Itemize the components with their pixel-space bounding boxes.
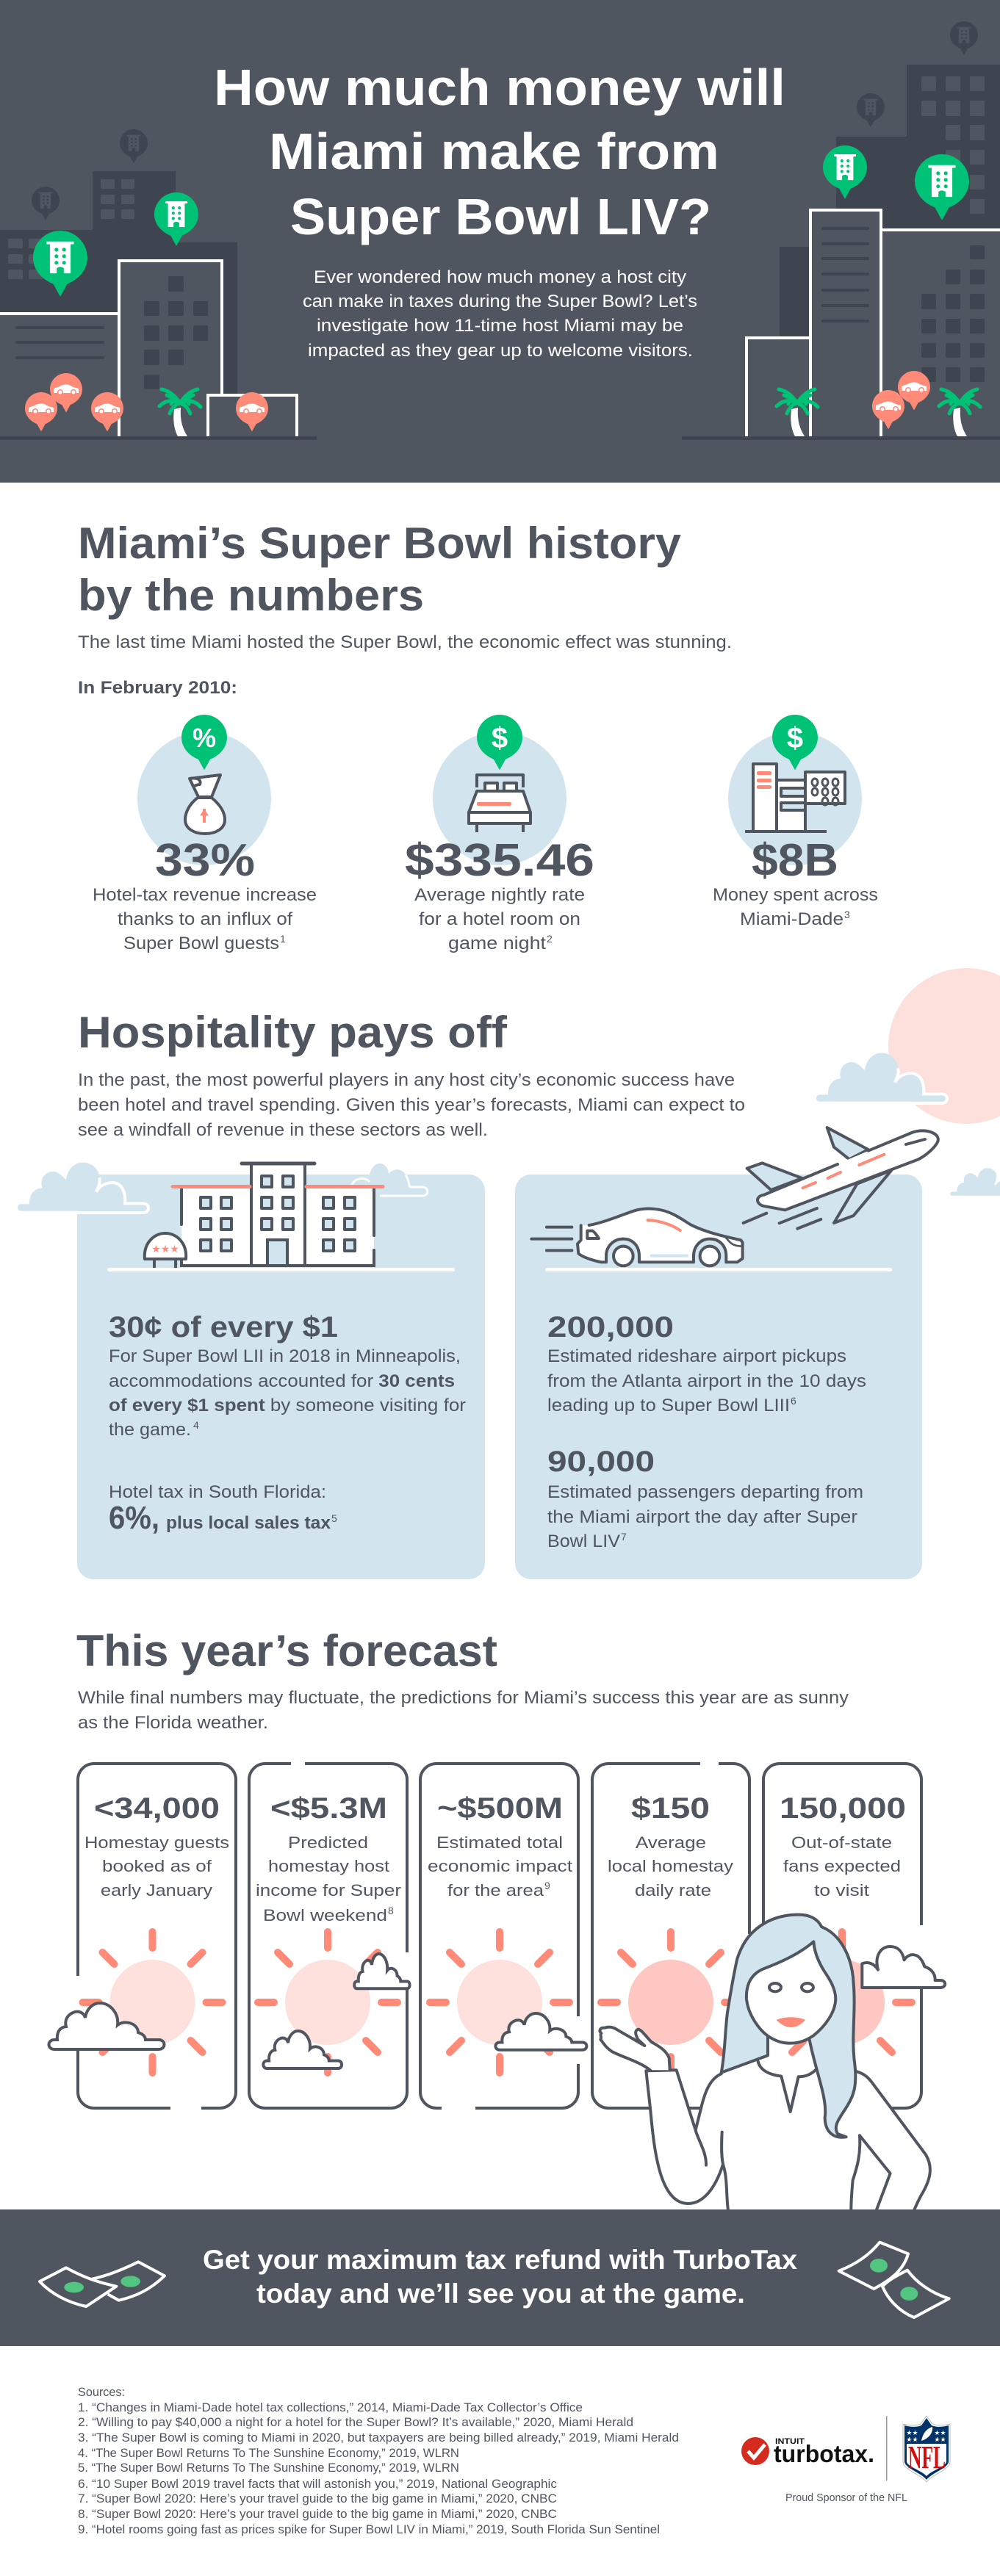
icon: city buildings [745, 764, 845, 831]
cloud: right edge [950, 1168, 1000, 1197]
palm trees [159, 389, 980, 436]
stat: $335.46: $335.46 [405, 835, 594, 886]
sun [258, 1932, 398, 2073]
sources: 5. “The Super Bowl Returns To The Sunshine Economy,” 2019, WLRN [78, 2461, 459, 2475]
cloud: lower [263, 2031, 342, 2068]
pin: percent: % [193, 723, 216, 753]
stat: $8B [713, 715, 878, 929]
forecast card 2: Bowl weekend [263, 1906, 387, 1924]
stat: 90,000: 7 [621, 1531, 627, 1543]
text: Minneapolis: For Super Bowl LII in 2018 in Minneapolis, [109, 1346, 461, 1366]
stat: 33%: Super Bowl guests [123, 934, 279, 953]
sources [78, 2385, 679, 2536]
forecast card 5: 150,000 [780, 1792, 906, 1825]
intro text: can make in taxes during the Super Bowl? Let’s [303, 292, 697, 311]
stat: $8B: 3 [844, 909, 850, 920]
icon: hotel sign [145, 1233, 186, 1269]
stat: $8B: $8B [752, 835, 838, 886]
title: Miami make from [269, 123, 719, 180]
stat: 33%: 1 [280, 933, 286, 945]
cloud: left [18, 1163, 148, 1213]
sources: 9. “Hotel rooms going fast as prices spike for Super Bowl LIV in Miami,” 2019, South Florida Sun Sentinel [78, 2522, 660, 2536]
forecast card 2: 8 [388, 1905, 394, 1916]
icon: car [531, 1209, 743, 1266]
forecast card 5: fans expected [783, 1857, 901, 1875]
text: hotel tax: Hotel tax in South Florida: [109, 1482, 326, 1502]
call to action banner: Get your maximum tax refund with TurboTax [203, 2245, 797, 2275]
stat: $8B: Money spent across [713, 885, 878, 905]
hospitality intro: see a windfall of revenue in these sectors as well. [78, 1120, 488, 1140]
stat: 33%: Hotel-tax revenue increase [93, 885, 317, 905]
forecast card 2: income for Super [256, 1881, 401, 1899]
sources: 6. “10 Super Bowl 2019 travel facts that will astonish you,” 2019, National Geographic [78, 2477, 558, 2491]
coral car pins [25, 371, 930, 431]
stat: 200,000 [547, 1311, 866, 1415]
forecast card 4: daily rate [635, 1881, 711, 1899]
right skyline [747, 65, 1000, 436]
text: hotel tax [109, 1482, 337, 1536]
hospitality intro: been hotel and travel spending. Given this year’s forecasts, Miami can expect to [78, 1095, 745, 1115]
icon: hotel sign: ★★★ [151, 1243, 179, 1255]
sources: 2. “Willing to pay $40,000 a night for a hotel for the Super Bowl? It’s available,” 2020, Miami Herald [78, 2415, 633, 2429]
hair [722, 1915, 855, 2137]
forecast card 1 [48, 1764, 236, 2108]
cloud [862, 1947, 945, 1988]
heading: history [78, 519, 682, 620]
icon: plane [744, 1128, 938, 1229]
text: Minneapolis: the game. [109, 1420, 191, 1440]
forecast card 1: <34,000 [94, 1792, 220, 1825]
eyes [769, 1983, 781, 1991]
stat: 200,000: 6 [791, 1395, 796, 1407]
intro text: investigate how 11-time host Miami may be [317, 316, 683, 336]
stat: 90,000: Bowl LIV [547, 1531, 620, 1551]
forecast card 5: to visit [814, 1881, 869, 1899]
stat: 200,000: 200,000 [547, 1311, 674, 1343]
forecast card 3: 9 [544, 1880, 550, 1891]
intro text: impacted as they gear up to welcome visitors. [308, 341, 693, 361]
forecast card 4: Average [636, 1833, 706, 1852]
text: Minneapolis [109, 1346, 466, 1440]
cloud [48, 2003, 165, 2049]
logo: TurboTax [741, 2437, 874, 2467]
cloud: top right [816, 1053, 947, 1103]
ghost hotel pins [32, 21, 978, 220]
header banner [0, 0, 1000, 483]
stat: $335.46: 2 [547, 933, 553, 945]
face [747, 1941, 835, 2043]
left skyline [0, 171, 297, 436]
stat: $335.46: for a hotel room on [419, 909, 580, 929]
cloud: upper [354, 1954, 410, 1988]
collar [758, 2062, 818, 2112]
text: Minneapolis: accommodations accounted for 30 cents [109, 1371, 455, 1391]
forecast intro [78, 1688, 849, 1733]
sources: 1. “Changes in Miami-Dade hotel tax collections,” 2014, Miami-Dade Tax Collector’s Office [78, 2400, 583, 2414]
logo: NFL shield: ★★ [934, 2436, 946, 2443]
stat: 33%: thanks to an influx of [118, 909, 292, 929]
heading: forecast: This year’s forecast [76, 1626, 497, 1675]
icon: cash right [839, 2243, 949, 2317]
text: hotel tax: 5 [331, 1512, 337, 1524]
forecast card 1: Homestay guests [84, 1833, 229, 1852]
stat: 200,000: leading up to Super Bowl LIII [547, 1396, 790, 1415]
forecast card 5: Out-of-state [791, 1833, 892, 1852]
text: hotel tax: plus local sales tax [166, 1513, 331, 1533]
title: How much money will [214, 59, 785, 116]
forecast card 1: early January [101, 1881, 212, 1899]
forecast card 3: Estimated total [436, 1833, 563, 1852]
logo: NFL shield: ★★ [906, 2429, 918, 2436]
forecast card 3: economic impact [428, 1857, 572, 1875]
title: Super Bowl LIV? [290, 188, 711, 245]
icon: cash left [40, 2262, 165, 2306]
forecast card 5 [763, 1764, 945, 2108]
stat: 200,000: from the Atlanta airport in the 10 days [547, 1371, 866, 1391]
forecast card 2: homestay host [268, 1857, 389, 1875]
stat: $335.46: game night [448, 934, 546, 953]
pin: dollar: $ [492, 722, 508, 754]
ground lines [0, 436, 1000, 440]
icon: money bag [185, 775, 225, 834]
cloud: small behind hotel [351, 1163, 428, 1196]
panel: hotel [18, 1163, 1000, 1579]
forecast card 2 [249, 1764, 410, 2108]
text: hotel tax: 6%, [109, 1500, 159, 1536]
pin: dollar [477, 715, 522, 770]
hand [600, 2027, 670, 2070]
stat: 90,000 [547, 1446, 863, 1551]
icon: hotel [145, 1163, 383, 1269]
stat: 90,000: the Miami airport the day after Super [547, 1507, 857, 1527]
logo: NFL shield: NFL [908, 2439, 946, 2475]
intro text [303, 267, 697, 361]
stat: $335.46: Average nightly rate [414, 885, 585, 905]
sources: 8. “Super Bowl 2020: Here’s your travel guide to the big game in Miami,” 2020, CNBC [78, 2507, 557, 2521]
call to action banner [0, 2209, 1000, 2346]
heading: history: by the numbers [78, 571, 424, 620]
stat: 33% [93, 715, 317, 953]
sources: 7. “Super Bowl 2020: Here’s your travel guide to the big game in Miami,” 2020, CNBC [78, 2492, 557, 2505]
stat: 90,000: 90,000 [547, 1446, 655, 1478]
body and blouse [646, 2062, 930, 2210]
panel: travel [515, 1128, 938, 1579]
logo: TurboTax: INTUIT [775, 2437, 805, 2446]
cloud [495, 2013, 586, 2050]
logo: NFL shield: ★★ [934, 2429, 946, 2436]
pin: dollar [772, 715, 818, 770]
logo: NFL shield [903, 2416, 950, 2482]
text: Minneapolis: of every $1 spent by someone visiting for [109, 1396, 466, 1415]
stat heading: 30 cents: 30¢ of every $1 [109, 1311, 338, 1343]
logo: NFL shield: ★★ [906, 2436, 918, 2443]
stat: 200,000: Estimated rideshare airport pickups [547, 1346, 846, 1366]
subheading: February 2010: In February 2010: [78, 678, 237, 698]
green hotel pins [33, 145, 969, 297]
forecast card 2: <$5.3M [270, 1792, 387, 1825]
intro text: Ever wondered how much money a host city [314, 267, 686, 287]
hospitality intro: In the past, the most powerful players in any host city’s economic success have [78, 1070, 735, 1090]
hospitality intro [78, 1070, 745, 1140]
mouth [777, 2017, 805, 2027]
sun [601, 1932, 741, 2073]
sun [772, 1932, 912, 2073]
sources: Sources: [78, 2385, 125, 2399]
history intro: The last time Miami hosted the Super Bowl, the economic effect was stunning. [78, 632, 732, 652]
sponsor caption: Proud Sponsor of the NFL [785, 2492, 907, 2504]
forecast card 3: ~$500M [437, 1792, 563, 1825]
stat: 33%: 33% [155, 835, 255, 886]
sun [82, 1932, 222, 2073]
forecast intro: While final numbers may fluctuate, the predictions for Miami’s success this year are as sunny [78, 1688, 849, 1708]
sources: 4. “The Super Bowl Returns To The Sunshine Economy,” 2019, WLRN [78, 2446, 459, 2460]
forecast intro: as the Florida weather. [78, 1713, 268, 1733]
illustration: woman [600, 1915, 930, 2210]
stat: $335.46 [405, 715, 594, 953]
forecast card 3 [420, 1764, 586, 2108]
forecast card 3: for the area [447, 1881, 544, 1899]
stat: 90,000: Estimated passengers departing from [547, 1482, 863, 1502]
icon: bed [469, 775, 530, 832]
forecast card 2: Predicted [288, 1833, 368, 1852]
forecast card 1: booked as of [102, 1857, 212, 1875]
title [214, 59, 785, 245]
divider [886, 2416, 888, 2481]
call to action banner: today and we’ll see you at the game. [256, 2279, 745, 2309]
heading: hospitality: Hospitality pays off [78, 1008, 508, 1057]
forecast card 4: local homestay [608, 1857, 733, 1875]
sun [430, 1932, 569, 2073]
logo: TurboTax: turbotax. [774, 2440, 874, 2467]
stat: $8B: Miami-Dade [740, 909, 843, 929]
heading: history: Miami’s Super Bowl history [78, 519, 682, 568]
forecast card 4: $150 [631, 1792, 710, 1825]
text: Minneapolis: 4 [193, 1419, 199, 1431]
decorative sun [888, 968, 1000, 1124]
pin: dollar: $ [787, 722, 803, 754]
forecast card 4 [592, 1764, 749, 2108]
pin: percent [181, 715, 227, 770]
sources: 3. “The Super Bowl is coming to Miami in 2020, but taxpayers are being billed already,” 2019, Miami Herald [78, 2431, 679, 2445]
